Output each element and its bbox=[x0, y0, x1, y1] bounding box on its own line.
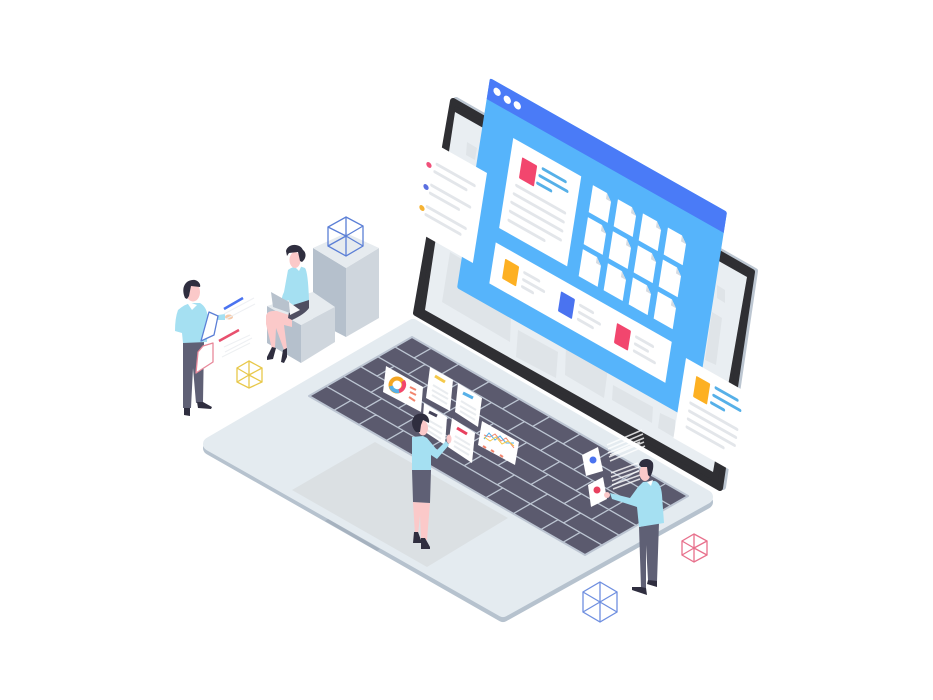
document card blue bbox=[455, 383, 482, 427]
floating browser window bbox=[457, 78, 727, 422]
floating chart and document cards over keyboard bbox=[383, 366, 519, 465]
laptop base deck bbox=[210, 326, 706, 615]
tall pedestal box bbox=[313, 233, 379, 337]
left floating list card bbox=[403, 134, 487, 263]
seat cube bbox=[267, 292, 335, 363]
document preview panel bbox=[499, 138, 581, 266]
document card dark bbox=[422, 403, 447, 445]
file card red badge bbox=[588, 477, 607, 507]
window title bar bbox=[487, 78, 727, 233]
right floating document card bbox=[673, 358, 748, 473]
laptop screen lid bbox=[416, 100, 755, 488]
icon: pink wire cube bbox=[682, 534, 707, 562]
icon: blue wire cube bottom bbox=[583, 582, 617, 622]
floating file cards near right man bbox=[582, 447, 607, 507]
person: standing woman bbox=[412, 414, 452, 549]
person: standing man reaching bbox=[604, 459, 664, 595]
keyboard bbox=[309, 337, 688, 555]
recent files strip bbox=[489, 242, 672, 383]
document card yellow bbox=[426, 367, 453, 411]
icon: blue wire cube on pedestal bbox=[328, 217, 363, 256]
file card blue badge bbox=[582, 447, 603, 476]
document card red bbox=[448, 418, 475, 463]
held tablet outlines and floating notes bbox=[196, 298, 255, 373]
trackpad bbox=[292, 442, 508, 567]
line chart card bbox=[478, 421, 519, 465]
person: seated woman with laptop bbox=[266, 245, 309, 363]
icon: yellow wire cube bbox=[237, 361, 262, 388]
projected light stripes bbox=[607, 430, 645, 489]
donut chart card bbox=[383, 366, 423, 412]
window body bbox=[457, 78, 727, 422]
isometric illustration: laptop and people bbox=[175, 78, 758, 623]
person: standing man with documents bbox=[175, 280, 233, 416]
file thumbnails grid bbox=[579, 185, 687, 329]
